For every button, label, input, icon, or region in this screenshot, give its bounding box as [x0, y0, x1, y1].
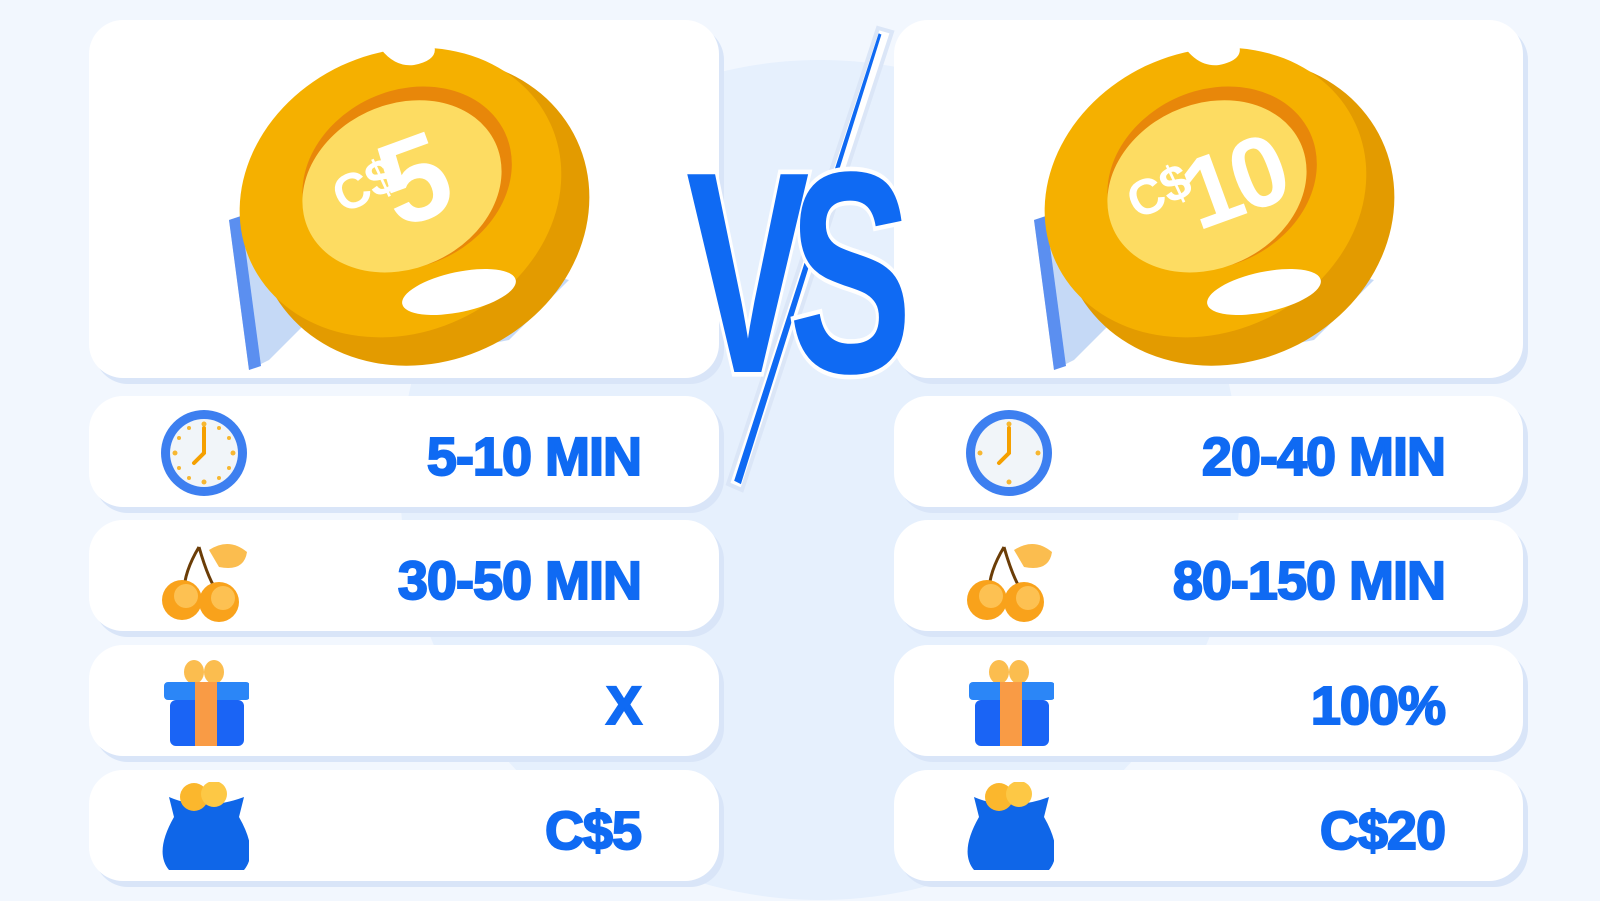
- panel: right coin: [894, 20, 1523, 378]
- value: X: [606, 676, 641, 736]
- value: C$5: [545, 801, 641, 861]
- value: 100%: [1311, 676, 1445, 736]
- icon: clock: [966, 410, 1052, 496]
- row: left cherries: [89, 520, 719, 631]
- icon: money bag: [968, 782, 1054, 870]
- icon: cherries: [162, 544, 247, 622]
- icon: cherries: [967, 544, 1052, 622]
- row: right bag: [894, 770, 1523, 881]
- row: right time: [894, 396, 1523, 507]
- icon: coin C$5: 5: [360, 105, 469, 254]
- background circle: [400, 60, 1240, 900]
- icon: money bag: [162, 782, 249, 870]
- icon: coin C$5: C$: [324, 146, 405, 224]
- value: 80-150 MIN: [1173, 551, 1445, 611]
- icon: coin C$10: [997, 0, 1445, 423]
- value: 5-10 MIN: [427, 427, 641, 487]
- value: 30-50 MIN: [398, 551, 641, 611]
- value: 20-40 MIN: [1202, 427, 1445, 487]
- panel: left coin: [89, 20, 719, 378]
- row: left bag: [89, 770, 719, 881]
- icon: coin C$10: C$: [1118, 152, 1200, 230]
- VS graphic: VS: [686, 113, 905, 434]
- VS graphic: [686, 26, 905, 492]
- row: right gift: [894, 645, 1523, 756]
- row: right cherries: [894, 520, 1523, 631]
- icon: gift: [164, 660, 249, 746]
- icon: clock: [161, 410, 247, 496]
- icon: gift: [969, 660, 1054, 746]
- icon: coin C$5: [192, 0, 640, 423]
- row: left time: [89, 396, 719, 507]
- icon: coin C$10: 10: [1167, 112, 1301, 252]
- value: C$20: [1320, 801, 1445, 861]
- row: left gift: [89, 645, 719, 756]
